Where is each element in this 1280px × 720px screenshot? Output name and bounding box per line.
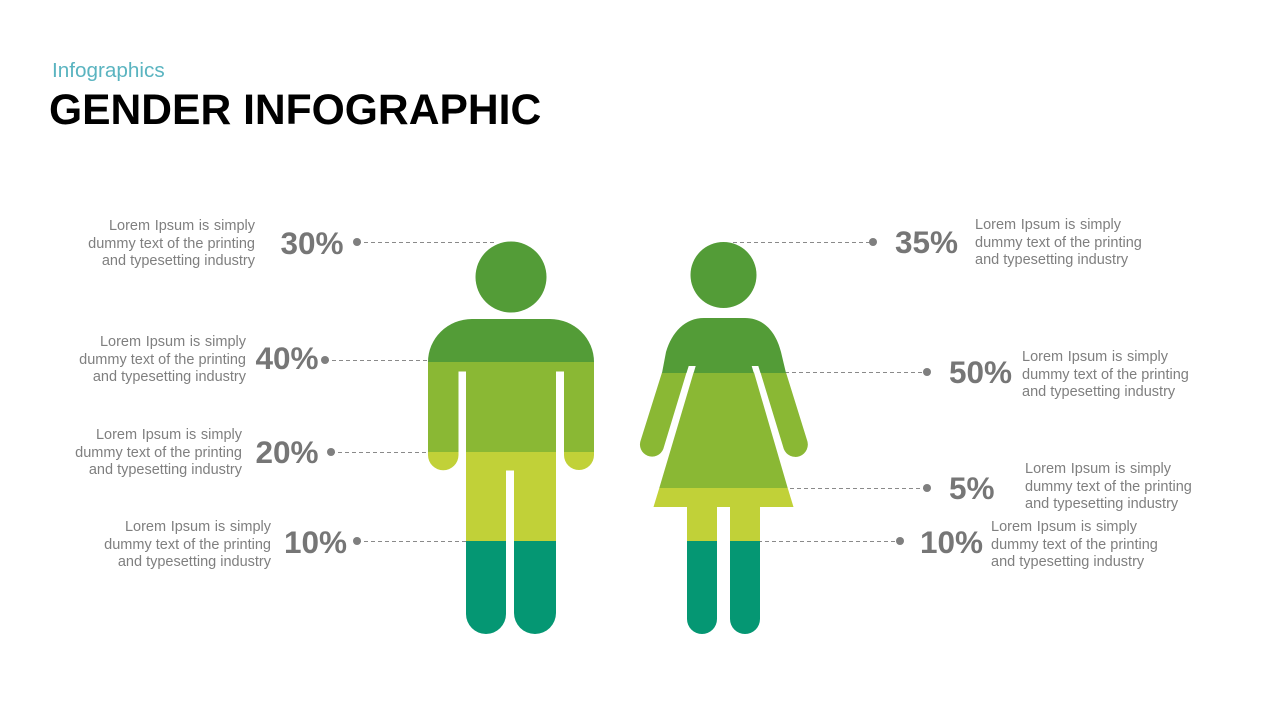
label: female 5% (949, 461, 1192, 512)
label: female 50% (949, 349, 1189, 400)
label: male 40%: Lorem Ipsum is simply (100, 334, 246, 350)
label: female 35%: dummy text of the printing (975, 234, 1142, 250)
label: male 40%: dummy text of the printing (79, 352, 246, 368)
label: female 10%: Lorem Ipsum is simply (991, 519, 1137, 535)
icon: male figure (428, 242, 594, 634)
label: female 35% (895, 217, 1142, 268)
label: male 40%: and typesetting industry (93, 369, 246, 385)
icon: female figure (640, 242, 808, 634)
male hands (428, 452, 594, 470)
label: female 50%: 50% (949, 354, 1012, 390)
female dress (659, 372, 788, 488)
title: GENDER INFOGRAPHIC (49, 86, 541, 134)
female upper legs (687, 507, 760, 541)
label: female 5%: and typesetting industry (1025, 496, 1178, 512)
female left arm (640, 372, 686, 457)
label: female 50%: dummy text of the printing (1022, 366, 1189, 382)
label: female 5%: Lorem Ipsum is simply (1025, 461, 1171, 477)
label: female 10%: dummy text of the printing (991, 536, 1158, 552)
label: male 20%: and typesetting industry (89, 462, 242, 478)
male thighs (466, 452, 556, 541)
label: male 10%: and typesetting industry (118, 554, 271, 570)
female head (690, 242, 756, 308)
label: male 10%: 10% (284, 524, 347, 560)
female right arm (760, 372, 808, 457)
label: male 30% (88, 218, 344, 269)
male lower legs (466, 541, 556, 634)
male torso and arms (428, 362, 594, 452)
label: female 50%: Lorem Ipsum is simply (1022, 349, 1168, 365)
label: female 10%: 10% (920, 524, 983, 560)
male shoulders (428, 319, 594, 362)
label: female 50%: and typesetting industry (1022, 384, 1175, 400)
label: female 35%: Lorem Ipsum is simply (975, 217, 1121, 233)
label: male 10%: Lorem Ipsum is simply (125, 519, 271, 535)
label: male 20%: Lorem Ipsum is simply (96, 427, 242, 443)
label: female 5%: dummy text of the printing (1025, 478, 1192, 494)
female lower legs (687, 541, 760, 634)
label: male 20%: dummy text of the printing (75, 444, 242, 460)
label: female 35%: 35% (895, 224, 958, 260)
label: male 30%: 30% (280, 225, 344, 261)
label: male 20% (75, 427, 318, 478)
label: male 30%: and typesetting industry (102, 253, 255, 269)
label: female 10%: and typesetting industry (991, 554, 1144, 570)
male head (476, 242, 546, 312)
subtitle: Infographics (52, 59, 165, 82)
label: male 10%: dummy text of the printing (104, 536, 271, 552)
label: male 40% (79, 334, 318, 385)
label: male 30%: dummy text of the printing (88, 236, 255, 252)
label: male 30%: Lorem Ipsum is simply (109, 218, 255, 234)
label: male 20%: 20% (255, 434, 318, 470)
label: female 5%: 5% (949, 470, 995, 506)
label: male 40%: 40% (255, 340, 318, 376)
label: male 10% (104, 519, 347, 570)
female shoulders (662, 318, 786, 373)
label: female 10% (920, 519, 1158, 570)
female skirt hem (654, 488, 794, 507)
label: female 35%: and typesetting industry (975, 252, 1128, 268)
